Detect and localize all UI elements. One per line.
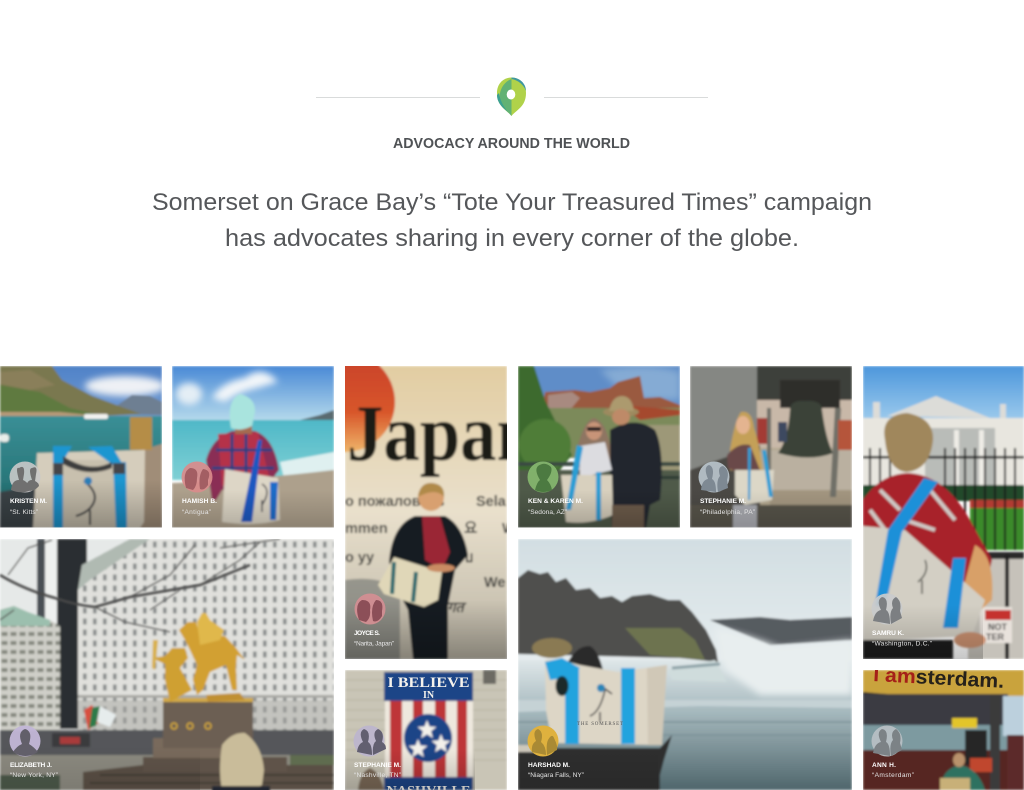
header [152,78,872,252]
caption: Samru K.: SAMRU K. [872,630,904,637]
caption: Ann H. [872,762,914,779]
panel: St. Kitts [0,366,165,528]
caption: Ann H.: “Amsterdam” [872,772,914,779]
avatar: Elizabeth J. [10,726,40,756]
avatar: Stephanie M. [698,462,730,492]
photo: woman at Japan sign: ับ [458,550,473,566]
caption: Elizabeth J.: ELIZABETH J. [10,762,52,769]
panel: Amsterdam [863,664,1024,790]
caption: Elizabeth J. [10,762,58,779]
caption: Kristen M.: KRISTEN M. [10,498,47,505]
caption: Ken & Karen M.: “Sedona, AZ” [528,509,567,516]
caption: Ann H.: ANN H. [872,762,896,769]
icon: map pin logo [497,78,526,116]
photo: White House [863,366,1024,659]
avatar: Harshad M. [528,726,558,756]
tree branches [0,539,280,632]
avatar: Ken & Karen M. [528,462,558,492]
photo: woman at Japan sign: ागत [435,600,468,616]
caption: Hamish B.: HAMISH B. [182,498,217,505]
caption: Joyce S.: JOYCE S. [354,630,380,637]
intro text: has advocates sharing in every corner of the globe. [225,225,799,252]
photo: White House: TER [986,632,1005,642]
caption gradient [345,608,507,659]
photo: woman at Japan sign [345,366,507,659]
caption: Harshad M.: HARSHAD M. [528,762,570,769]
caption: Kristen M.: “St. Kitts” [10,509,38,516]
photo: woman at Japan sign: о уу [345,550,374,566]
panel: Niagara Falls, NY [518,539,852,790]
caption: Stephanie M. [354,762,401,779]
caption: Stephanie M.: “Nashville, TN” [354,772,401,779]
caption: Samru K. [872,630,932,648]
caption: Elizabeth J.: “New York, NY” [10,772,58,779]
avatar: Samru K. [872,594,902,624]
photo: woman at Japan sign: We [484,575,506,591]
caption: Harshad M.: “Niagara Falls, NY” [528,772,584,779]
panel: Nashville, TN [345,670,507,790]
caption: Stephanie M. [700,498,755,516]
caption gradient [518,497,680,528]
caption gradient [345,758,475,790]
panel: Sedona, AZ [518,366,680,528]
caption gradient [518,750,658,790]
panel: Washington, D.C. [863,366,1024,659]
caption gradient [690,499,852,528]
photo: woman at Japan sign: о пожаловать [345,494,445,510]
avatar: Stephanie M. [354,726,386,756]
caption: Stephanie M.: “Philadelphia, PA” [700,509,755,516]
photo: I Believe in Nashville mural [345,670,507,790]
caption: Ken & Karen M.: KEN & KAREN M. [528,498,583,505]
photo: woman at Japan sign: 요 [464,520,477,537]
panel: Narita, Japan [345,366,507,659]
intro text [152,189,872,252]
caption: Kristen M. [10,498,46,514]
photo: woman at Japan sign: Sela [476,494,507,510]
photo: Amsterdam airport shop [863,670,1024,790]
sign lettering: I amsterdam. [873,664,1005,693]
avatar: Hamish B. [182,462,212,492]
photo: golden statue and hotel [0,539,334,790]
caption: Harshad M. [528,762,584,779]
mural lettering: I BELIEVE [388,675,470,691]
caption: Joyce S. [354,630,394,648]
caption: Hamish B. [182,498,217,516]
photo: woman at Japan sign: W [502,521,516,537]
caption: Ken & Karen M. [528,498,583,516]
caption gradient [0,764,200,790]
panel: Philadelphia, PA [690,366,852,528]
caption: Hamish B.: “Antigua” [182,509,211,516]
photo: woman at Japan sign: Japan [347,390,537,478]
intro text: Somerset on Grace Bay’s “Tote Your Treasured Times” campaign [152,189,872,216]
avatar: Ann H. [872,726,902,756]
caption: Joyce S.: “Narita, Japan” [354,640,394,648]
heading: ADVOCACY AROUND THE WORLD [393,136,630,152]
caption gradient [863,614,983,659]
mural lettering: IN [423,690,435,701]
photo: woman at Japan sign: mmen [345,521,388,537]
photo: tote at Niagara Falls [518,539,852,790]
caption gradient [0,487,162,528]
caption: Stephanie M.: STEPHANIE M. [354,762,401,769]
caption: Stephanie M.: STEPHANIE M. [700,498,746,505]
photo: harbour with tote [0,366,165,528]
avatar: Kristen M. [10,462,40,492]
caption gradient [172,498,334,528]
photo: White House: NOT [988,622,1008,632]
panel: New York, NY [0,539,334,790]
caption: Samru K.: “Washington, D.C.” [872,640,932,648]
photo: man on beach [172,366,334,528]
tote lettering: THE SOMERSET [577,722,623,727]
photo: couple with red rocks [518,366,680,528]
mural lettering [386,675,470,790]
panel: Antigua [172,366,334,528]
avatar: Joyce S. [354,594,386,624]
photo: Liberty Bell [690,366,852,528]
